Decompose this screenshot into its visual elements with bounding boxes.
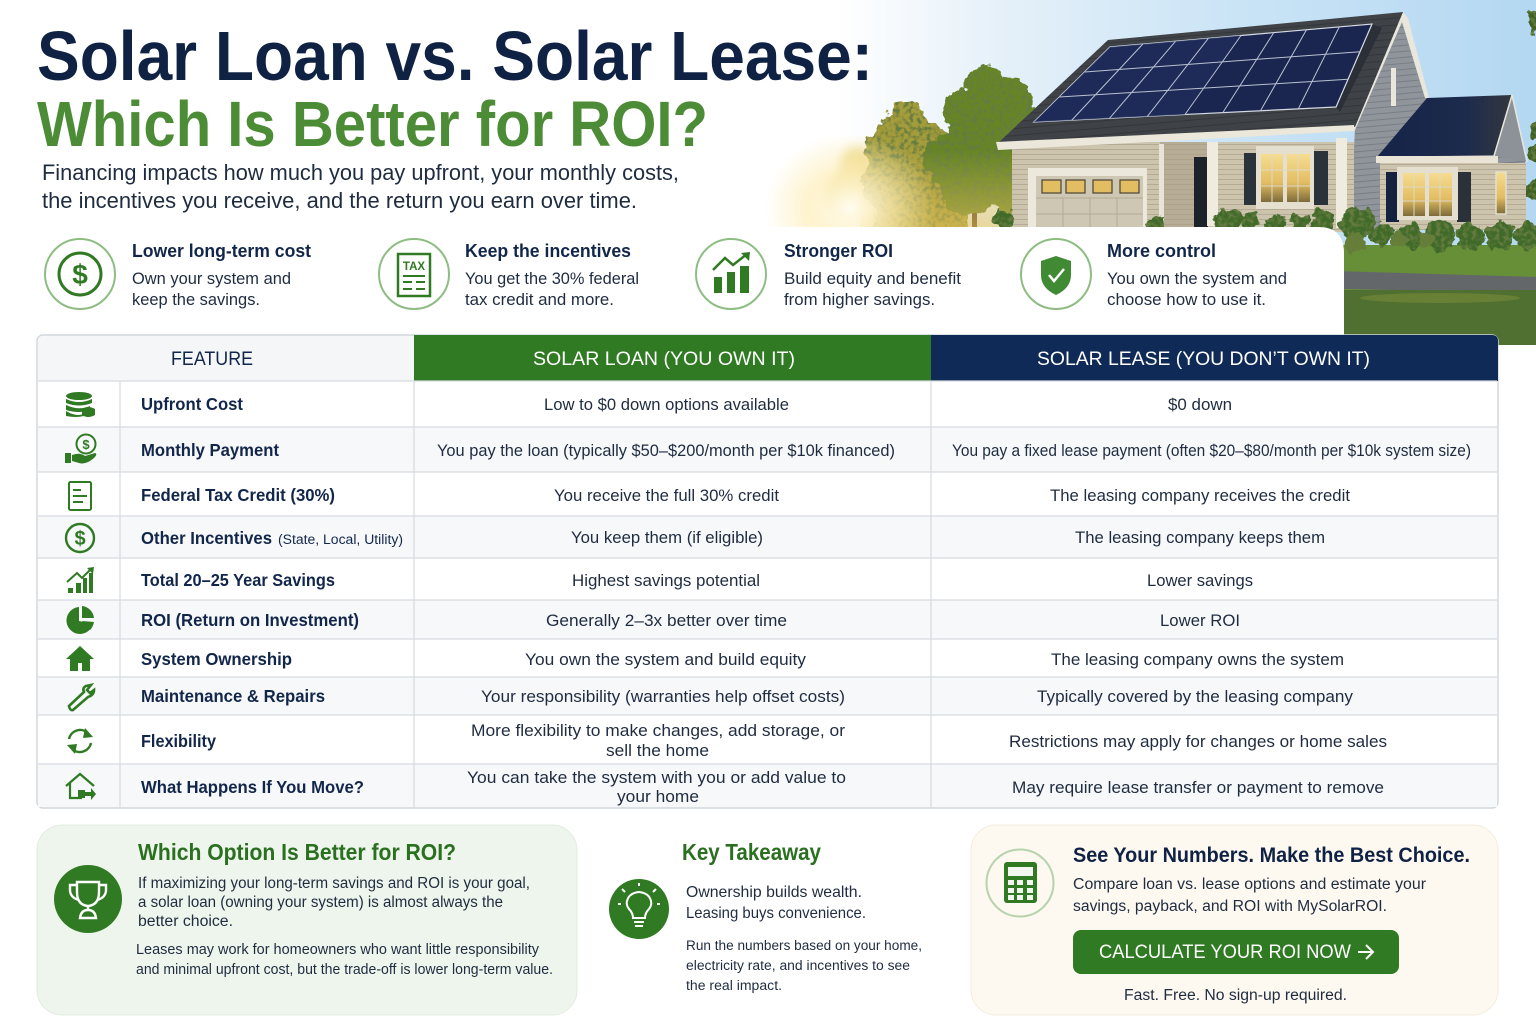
panel: which option is better: better choice. — [138, 913, 233, 930]
comparison table — [37, 335, 1498, 808]
row: total savings: Lower savings — [1147, 571, 1253, 590]
row: maintenance: Maintenance & Repairs — [141, 686, 325, 706]
sun glow — [765, 133, 935, 283]
row: flexibility: sell the home — [606, 741, 709, 760]
row: other incentives: You keep them (if eligible) — [571, 528, 763, 547]
icon: document — [69, 482, 91, 510]
row: total savings: Highest savings potential — [572, 571, 760, 590]
icon: dollar circle — [45, 239, 115, 309]
panel: which option is better: and minimal upfront cost, but the trade-off is lower long-term value. — [136, 962, 553, 978]
panel: call to action: Compare loan vs. lease options and estimate your — [1073, 876, 1426, 893]
benefit: lower long-term cost: keep the savings. — [132, 291, 260, 309]
hero photo: house with solar panels — [760, 0, 1536, 345]
icon: house with arrow — [66, 774, 96, 800]
icon: dollar circle: $ — [74, 528, 86, 550]
panel: which option is better: Leases may work for homeowners who want little responsibility — [136, 942, 540, 958]
row: ROI: ROI (Return on Investment) — [141, 610, 359, 630]
row: if you move: You can take the system with you or add value to — [467, 768, 846, 787]
row: monthly payment — [65, 434, 1471, 463]
row: system ownership: You own the system and build equity — [525, 650, 806, 669]
row: maintenance: Your responsibility (warranties help offset costs) — [481, 687, 845, 706]
row: ROI: Lower ROI — [1160, 611, 1240, 630]
benefit: stronger ROI — [696, 239, 961, 309]
row: flexibility: Flexibility — [141, 731, 216, 751]
row: upfront cost: $0 down — [1168, 395, 1232, 414]
icon: wrench — [69, 685, 94, 710]
row: upfront cost: Upfront Cost — [141, 394, 243, 414]
garage — [1028, 168, 1147, 230]
row: system ownership — [66, 646, 1344, 671]
panel: benefits strip background — [0, 227, 1344, 345]
icon: tax form: TAX — [403, 261, 425, 273]
panel: key takeaway: Key Takeaway — [682, 839, 821, 865]
row: upfront cost — [66, 392, 1232, 417]
table header: SOLAR LOAN (YOU OWN IT) — [533, 348, 795, 370]
subtitle — [42, 160, 679, 213]
table header: FEATURE — [171, 348, 253, 370]
panel: which option is better: a solar loan (owning your system) is almost always the — [138, 894, 503, 911]
row: upfront cost: Low to $0 down options available — [544, 395, 789, 414]
row: maintenance: Typically covered by the leasing company — [1037, 687, 1353, 706]
panel: call to action: savings, payback, and ROI with MySolarROI. — [1073, 898, 1387, 915]
icon: tax form — [379, 239, 449, 309]
icon: refresh arrows — [67, 728, 93, 754]
benefit: lower long-term cost — [45, 239, 311, 309]
solar panels array — [1034, 24, 1382, 122]
row: total savings: Total 20–25 Year Savings — [141, 570, 335, 590]
benefit: more control: choose how to use it. — [1107, 291, 1266, 309]
icon: growth chart — [696, 239, 766, 309]
row: federal tax credit: Federal Tax Credit (30%) — [141, 485, 335, 505]
benefit: more control: More control — [1107, 240, 1216, 261]
panel: call to action: Fast. Free. No sign-up required. — [1124, 987, 1347, 1004]
house right gable and wing — [1350, 12, 1527, 230]
row: if you move: What Happens If You Move? — [141, 777, 364, 797]
icon: coin stacks — [66, 392, 95, 417]
shrubs — [994, 207, 1536, 253]
benefit: keep the incentives — [379, 239, 639, 309]
button: calculate ROI: CALCULATE YOUR ROI NOW — [1099, 942, 1351, 963]
panel: key takeaway: electricity rate, and incentives to see — [686, 958, 910, 973]
icon: hand with coin: $ — [82, 437, 90, 452]
benefit: stronger ROI: Build equity and benefit — [784, 270, 961, 288]
benefit: stronger ROI: Stronger ROI — [784, 240, 893, 261]
subtitle: Financing impacts how much you pay upfront, your monthly costs, — [42, 160, 679, 185]
main wall — [1012, 142, 1354, 232]
panel: call to action — [971, 825, 1498, 1015]
row: maintenance — [69, 685, 1353, 710]
title: Solar Loan vs. Solar Lease: — [37, 17, 873, 95]
icon: dollar circle — [66, 524, 94, 552]
benefit: lower long-term cost: Lower long-term cost — [132, 240, 311, 261]
benefit: lower long-term cost: Own your system and — [132, 270, 291, 288]
panel: key takeaway: Run the numbers based on your home, — [686, 938, 922, 953]
row: other incentives: (State, Local, Utility) — [278, 532, 403, 547]
row: monthly payment: You pay a fixed lease payment (often $20–$80/month per $10k system size) — [952, 441, 1471, 460]
row: ROI: Generally 2–3x better over time — [546, 611, 787, 630]
icon: rising bars — [67, 567, 94, 593]
icon: pie chart — [66, 606, 94, 634]
title: Which Is Better for ROI? — [37, 88, 708, 160]
benefit: keep the incentives: You get the 30% federal — [465, 270, 639, 288]
title — [37, 17, 873, 160]
right edge foliage — [1524, 10, 1536, 200]
row stripes — [38, 427, 1497, 807]
panel: key takeaway: Leasing buys convenience. — [686, 905, 866, 922]
icon: hand with coin — [65, 434, 96, 463]
panel: which option is better — [37, 825, 577, 1015]
row: total savings — [67, 567, 1253, 593]
icon: house — [66, 646, 94, 671]
icon: calculator — [986, 850, 1054, 916]
row: other incentives — [66, 524, 1325, 552]
row: other incentives: Other Incentives — [141, 528, 272, 548]
row: monthly payment: You pay the loan (typically $50–$200/month per $10k financed) — [437, 441, 895, 460]
grass and driveway — [1300, 245, 1536, 345]
trees at the left of the house — [826, 66, 1040, 245]
button: calculate ROI — [1073, 930, 1399, 974]
main roof — [998, 12, 1403, 143]
panel: key takeaway: Ownership builds wealth. — [686, 884, 862, 901]
benefit: keep the incentives: tax credit and more. — [465, 291, 614, 309]
row: federal tax credit: The leasing company receives the credit — [1050, 486, 1350, 505]
icon: dollar circle: $ — [72, 259, 88, 290]
row: flexibility: Restrictions may apply for changes or home sales — [1009, 732, 1387, 751]
icon: light bulb — [609, 879, 669, 939]
panel: call to action: See Your Numbers. Make the Best Choice. — [1073, 844, 1470, 867]
row: monthly payment: Monthly Payment — [141, 440, 279, 460]
row: flexibility — [67, 721, 1387, 760]
fascia — [996, 125, 1355, 150]
row: flexibility: More flexibility to make changes, add storage, or — [471, 721, 845, 740]
benefit: more control — [1021, 239, 1287, 309]
porch door and columns — [1159, 138, 1347, 230]
table header: SOLAR LEASE (YOU DON’T OWN IT) — [1037, 348, 1370, 370]
row: system ownership: System Ownership — [141, 649, 292, 669]
benefit: more control: You own the system and — [1107, 270, 1287, 288]
icon: trophy — [54, 865, 122, 933]
icon: shield check — [1021, 239, 1091, 309]
subtitle: the incentives you receive, and the return you earn over time. — [42, 188, 637, 213]
row: if you move: May require lease transfer or payment to remove — [1012, 778, 1384, 797]
panel: key takeaway — [609, 839, 922, 993]
row: other incentives: The leasing company keeps them — [1075, 528, 1325, 547]
benefit: stronger ROI: from higher savings. — [784, 291, 935, 309]
porch window — [1244, 146, 1328, 209]
row: system ownership: The leasing company owns the system — [1051, 650, 1344, 669]
row: if you move: your home — [617, 787, 699, 806]
panel: which option is better: Which Option Is Better for ROI? — [138, 839, 456, 865]
table header — [38, 335, 1498, 381]
row: ROI — [66, 606, 1240, 634]
panel: key takeaway: the real impact. — [686, 978, 782, 993]
benefit: keep the incentives: Keep the incentives — [465, 240, 631, 261]
panel: which option is better: If maximizing your long-term savings and ROI is your goal, — [138, 875, 530, 892]
table body background — [37, 335, 1498, 808]
row: federal tax credit: You receive the full 30% credit — [554, 486, 779, 505]
row: if you move — [66, 768, 1384, 806]
row: federal tax credit — [69, 482, 1350, 510]
